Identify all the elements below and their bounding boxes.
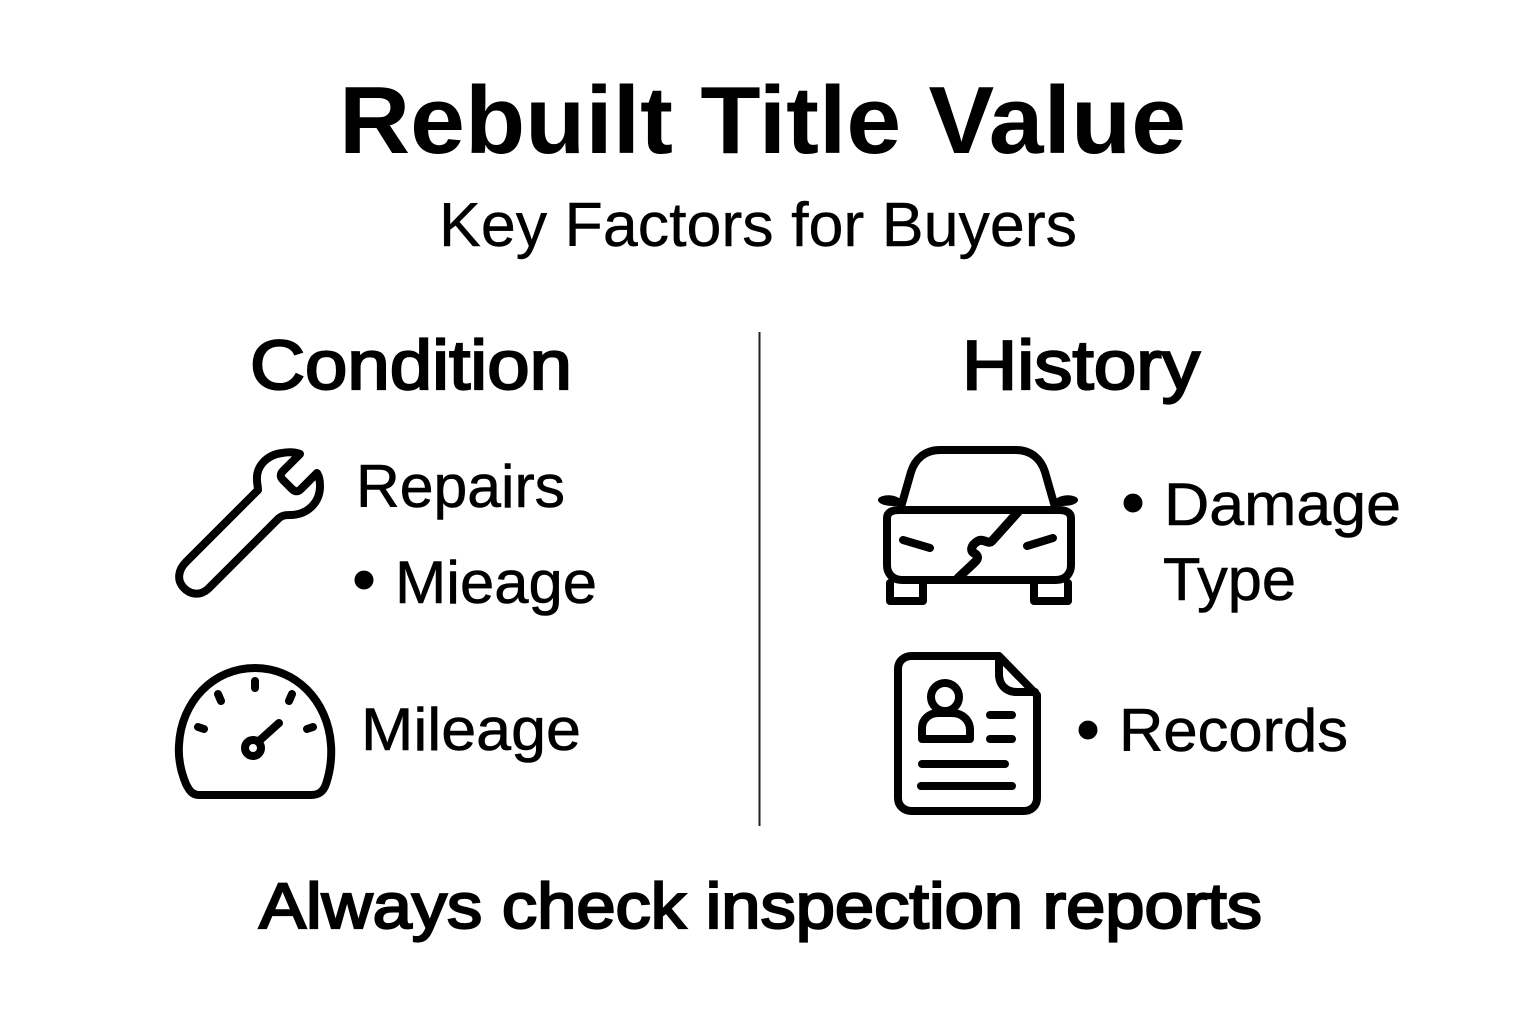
title: Rebuilt Title Value (339, 67, 1186, 174)
icon: speedometer (179, 668, 331, 795)
bullet and label: mieage (352, 540, 597, 618)
icon: damaged car (881, 450, 1075, 601)
icon: document (898, 656, 1037, 811)
bullet and label: damage type (1121, 463, 1401, 613)
heading: history: History (962, 326, 1200, 404)
label: mileage: Mileage (361, 696, 581, 763)
bullet and label: damage type: Type (1163, 546, 1296, 613)
panel: history (881, 326, 1401, 811)
bullet and label: mieage: • (352, 540, 376, 618)
heading: condition: Condition (250, 326, 572, 404)
subtitle: Key Factors for Buyers (439, 191, 1077, 260)
bullet and label: mieage: Mieage (395, 549, 597, 616)
bullet and label: damage type: • (1121, 463, 1145, 541)
footer callout: Always check inspection reports (259, 870, 1262, 942)
bullet and label: records: Records (1119, 697, 1348, 764)
panel: condition (179, 326, 597, 795)
bullet and label: records: • (1076, 690, 1100, 768)
label: repairs: Repairs (356, 453, 565, 520)
icon: wrench (179, 452, 320, 594)
bullet and label: damage type: Damage (1164, 471, 1401, 538)
